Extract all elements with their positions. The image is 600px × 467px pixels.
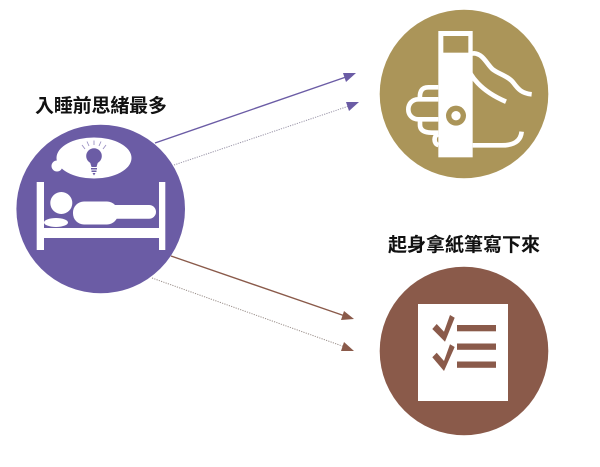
heading: left: 入睡前思緒最多 (35, 94, 167, 117)
icon: sleeping person (44, 192, 156, 227)
icon: fingers (408, 87, 438, 145)
icon: palm edge (473, 132, 522, 145)
icon: second check mark (432, 344, 455, 371)
arrow: purple dotted to phone (174, 102, 359, 165)
icon: thumb (467, 53, 532, 102)
panel: gold phone icon (380, 10, 548, 178)
icon: first check mark (432, 315, 455, 342)
icon: hand holding phone (408, 31, 532, 157)
icon: bed (37, 182, 165, 250)
icon: checklist (418, 304, 508, 401)
panel: purple sleeping icon (16, 125, 185, 293)
icon: thought bubble (52, 138, 132, 178)
icon: light bulb (82, 140, 106, 176)
icon: phone (438, 31, 473, 157)
arrow: brown solid to notes (171, 256, 354, 320)
heading: right: 起身拿紙筆寫下來 (388, 233, 540, 256)
panel: brown checklist icon (380, 267, 548, 435)
arrow: purple solid to phone (155, 73, 356, 143)
arrow: brown dotted to notes (152, 278, 354, 351)
